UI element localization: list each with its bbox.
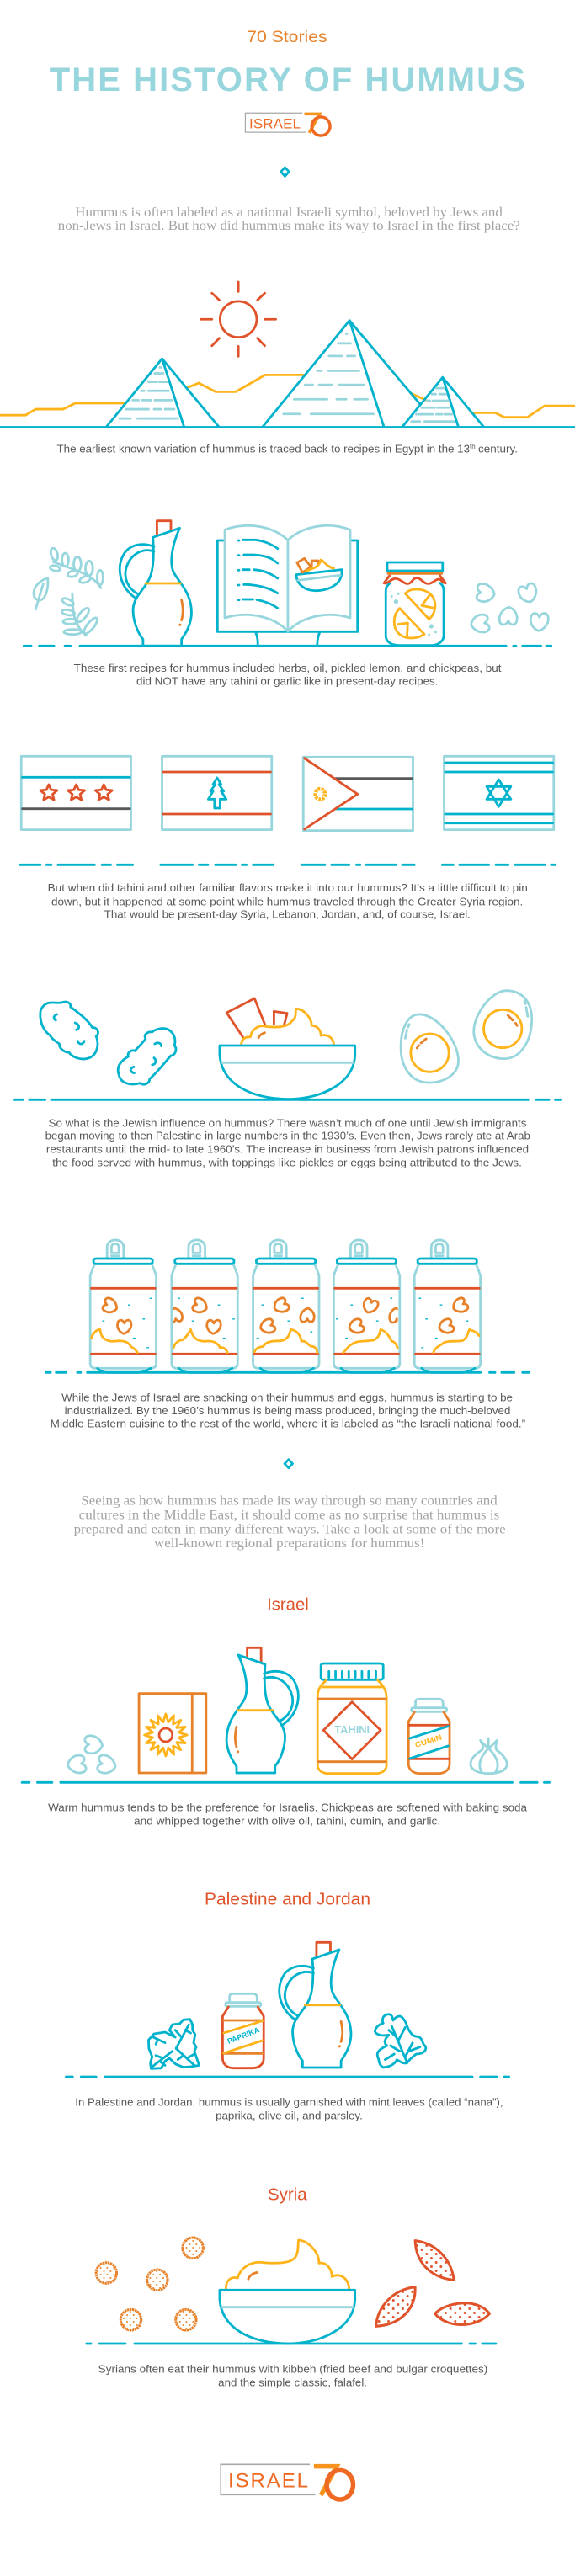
flag: Lebanon <box>162 756 272 830</box>
chickpeas on cans <box>102 1296 469 1335</box>
flag: Jordan <box>303 757 413 831</box>
icon: pickles <box>40 1002 176 1084</box>
can 1 <box>90 1240 157 1372</box>
can 5 <box>414 1240 481 1372</box>
icon: hummus bowl with pita <box>220 998 355 1099</box>
caption: Israel: and whipped together with olive oil, tahini, cumin, and garlic. <box>134 1815 440 1828</box>
desert horizon <box>0 375 575 418</box>
intro paragraph: Hummus is often labeled as a national Israeli symbol, beloved by Jews and <box>75 205 503 220</box>
pyramid: right <box>402 377 484 427</box>
ground line <box>22 1781 550 1784</box>
icon: garlic <box>471 1738 507 1774</box>
caption: Jewish influence: the food served with hummus, with toppings like pickles or eggs being attributed to the Jews. <box>52 1157 522 1169</box>
caption: first recipes <box>74 662 502 687</box>
can 3 <box>253 1240 319 1372</box>
caption: industrialized hummus <box>51 1392 525 1430</box>
caption: Jewish influence: restaurants until the mid- to late 1960’s. The increase in business from Jewish patrons influenced <box>46 1143 529 1156</box>
icon: olive oil jug <box>280 1942 351 2068</box>
logo: Israel 70 footer <box>221 2464 353 2499</box>
icon: tahini jar <box>317 1663 386 1774</box>
caption: industrialized hummus: Middle Eastern cuisine to the rest of the world, where it is labeled as “the Israeli national food.” <box>51 1418 525 1430</box>
icon: paprika jar <box>222 1993 264 2068</box>
label: cumin: CUMIN <box>414 1732 443 1749</box>
ground line <box>45 1371 530 1374</box>
caption: Jewish influence <box>45 1117 530 1169</box>
icon: parsley <box>375 2014 426 2068</box>
caption: Egypt: th <box>470 443 476 450</box>
illustration: Syria <box>87 2238 496 2344</box>
caption: flags: That would be present-day Syria, Lebanon, Jordan, and, of course, Israel. <box>104 908 471 921</box>
pyramid: centre <box>263 321 420 427</box>
title: THE HISTORY OF HUMMUS <box>50 61 525 98</box>
caption: industrialized hummus: While the Jews of Israel are snacking on their hummus and eggs, hummus is starting to be <box>61 1392 513 1404</box>
ground line <box>14 1099 561 1101</box>
intro paragraph: non-Jews in Israel. But how did hummus make its way to Israel in the first place? <box>58 219 520 233</box>
caption: Syria <box>98 2363 487 2389</box>
heading: Palestine and Jordan: Palestine and Jordan <box>205 1891 370 1909</box>
caption: Israel: Warm hummus tends to be the preference for Israelis. Chickpeas are softened with baking soda <box>48 1802 528 1814</box>
regional intro paragraph <box>74 1494 506 1551</box>
caption: first recipes: did NOT have any tahini or garlic like in present-day recipes. <box>136 674 438 687</box>
header <box>50 29 525 176</box>
icon: diamond divider <box>281 168 289 176</box>
illustration: Palestine and Jordan ingredients <box>66 1942 509 2077</box>
caption: Egypt: century. <box>478 443 518 455</box>
label: paprika: PAPRIKA <box>226 2025 261 2046</box>
ground line <box>24 645 551 647</box>
label: tahini: TAHINI <box>334 1724 370 1736</box>
icon: falafel balls <box>96 2238 203 2330</box>
can 4 <box>333 1240 400 1372</box>
intro paragraph <box>58 205 520 233</box>
illustration: first recipes <box>24 521 551 646</box>
icon: pickled lemon jar <box>384 562 445 646</box>
ground line <box>87 2343 496 2344</box>
icon: olive oil jug <box>120 521 191 646</box>
caption: Egypt: The earliest known variation of hummus is traced back to recipes in Egypt in the 13 <box>57 443 470 455</box>
illustration: hummus toppings <box>14 991 561 1099</box>
icon: open recipe book <box>217 525 358 646</box>
caption: Israel <box>48 1802 528 1828</box>
illustration: Egypt pyramids and sun <box>0 282 575 427</box>
icon: olive oil jug <box>226 1647 298 1773</box>
regional intro paragraph: Seeing as how hummus has made its way through so many countries and <box>81 1494 498 1509</box>
icon: kibbeh <box>375 2241 490 2326</box>
caption: industrialized hummus: industrialized. By the 1960’s hummus is being mass produced, bringing the much-beloved <box>65 1404 510 1417</box>
icon: chickpeas <box>67 1736 117 1775</box>
icon: baking soda box <box>139 1694 206 1773</box>
caption: Jewish influence: began moving to then Palestine in large numbers in the 1930’s. Even then, Jews rarely ate at Arab <box>45 1130 530 1142</box>
icon: diamond divider <box>285 1460 293 1468</box>
caption: flags: down, but it happened at some point while hummus traveled through the Greater Syria region. <box>51 896 523 908</box>
illustration: flags <box>20 756 555 865</box>
heading: Syria: Syria <box>268 2185 307 2204</box>
icon: herbs <box>34 548 103 636</box>
caption: flags: But when did tahini and other familiar flavors make it into our hummus? It’s a little difficult to pin <box>48 881 528 894</box>
pyramid: left <box>106 359 219 427</box>
icon: cumin jar <box>408 1699 450 1774</box>
caption: Jewish influence: So what is the Jewish influence on hummus? There wasn’t much of one until Jewish immigrants <box>49 1117 527 1130</box>
caption: Palestine and Jordan <box>75 2096 503 2122</box>
icon: sun <box>201 282 276 356</box>
caption: flags <box>48 881 528 921</box>
flag: Israel <box>445 756 554 830</box>
caption: Palestine and Jordan: paprika, olive oil, and parsley. <box>216 2110 363 2122</box>
heading: Israel: Israel <box>267 1596 309 1615</box>
can 2 <box>172 1240 237 1372</box>
kicker: 70 Stories: 70 Stories <box>247 29 327 46</box>
regional intro paragraph: well-known regional preparations for hummus! <box>154 1536 424 1551</box>
icon: hummus bowl <box>220 2240 355 2344</box>
icon: mint leaves <box>148 2020 200 2068</box>
illustration: Israel ingredients <box>22 1647 550 1782</box>
dashed ground lines <box>20 864 555 866</box>
caption: first recipes: These first recipes for hummus included herbs, oil, pickled lemon, and chickpeas, but <box>74 662 502 674</box>
caption: Palestine and Jordan: In Palestine and Jordan, hummus is usually garnished with mint leaves (called “nana”), <box>75 2096 503 2109</box>
flag: Syria <box>21 756 131 830</box>
logo: Israel 70 footer: ISRAEL <box>228 2469 308 2492</box>
regional intro paragraph: cultures in the Middle East, it should come as no surprise that hummus is <box>79 1509 499 1523</box>
regional intro paragraph: prepared and eaten in many different ways. Take a look at some of the more <box>74 1523 506 1537</box>
icon: chickpeas <box>470 583 548 634</box>
icon: boiled eggs <box>401 991 532 1083</box>
caption: Syria: and the simple classic, falafel. <box>218 2376 367 2389</box>
ground line <box>66 2076 509 2078</box>
caption: Syria: Syrians often eat their hummus with kibbeh (fried beef and bulgar croquettes) <box>98 2363 487 2376</box>
logo: Israel 70 <box>245 113 330 136</box>
ground line <box>0 426 575 428</box>
logo: Israel 70: ISRAEL <box>249 116 301 131</box>
illustration: hummus cans <box>45 1240 530 1372</box>
